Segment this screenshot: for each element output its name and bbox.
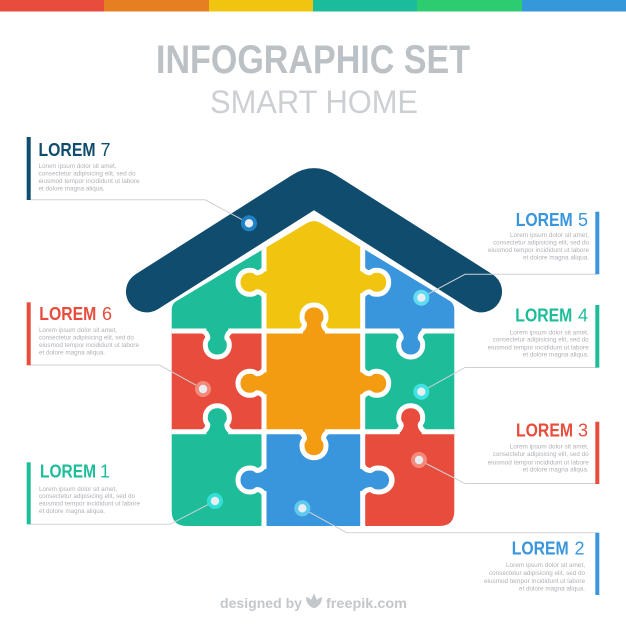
- tab: yellow into green: [238, 267, 267, 297]
- text block: lorem 1: eiusmod tempor incididunt ut labore: [39, 501, 141, 508]
- heading: lorem 6: LOREM: [39, 304, 96, 324]
- text block: lorem 6: Lorem ipsum dolor sit amet,: [39, 327, 117, 334]
- heading: lorem 1: LOREM: [40, 462, 96, 482]
- leader line 6: [30, 365, 203, 389]
- heading: lorem 2: LOREM: [512, 538, 569, 558]
- text block: lorem 5: [488, 232, 590, 262]
- text block: lorem 5: et dolore magna aliqua.: [523, 254, 589, 262]
- title: INFOGRAPHIC SET: [156, 38, 470, 82]
- leader line 3: [419, 460, 596, 484]
- heading: lorem 4: 4: [578, 306, 588, 326]
- text block: lorem 5: eiusmod tempor incididunt ut labore: [488, 247, 590, 254]
- marker 7: [241, 215, 257, 231]
- text block: lorem 4: eiusmod tempor incididunt ut labore: [488, 344, 589, 351]
- tab: orange into green: [360, 368, 389, 398]
- leader line 5: [421, 274, 596, 298]
- text block: lorem 3: consectetur adipisicing elit, sed do: [493, 451, 589, 458]
- leader line 7: [30, 200, 249, 223]
- text block: lorem 7: consectetur adipisicing elit, sed do: [38, 170, 136, 178]
- text block: lorem 3: et dolore magna aliqua.: [523, 466, 589, 473]
- tab: orange into blue: [299, 429, 329, 458]
- piece: bottom right red: [363, 432, 455, 527]
- heading: lorem 2: 2: [574, 538, 585, 558]
- text block: lorem 4: consectetur adipisicing elit, sed do: [493, 336, 589, 343]
- footer credit: freepik.com: [326, 595, 407, 611]
- text block: lorem 6: et dolore magna aliqua.: [39, 350, 105, 356]
- text block: lorem 6: [39, 327, 140, 356]
- piece: top left green: [172, 248, 264, 331]
- tab: red into green: [396, 406, 426, 435]
- piece: middle right green: [363, 331, 455, 432]
- piece: middle left red: [171, 331, 264, 432]
- tab: green into red: [202, 328, 232, 357]
- text block: lorem 3: eiusmod tempor incididunt ut labore: [488, 459, 589, 466]
- marker 6: [195, 381, 211, 397]
- marker 1: [207, 493, 223, 509]
- heading: lorem 6: 6: [102, 304, 112, 324]
- heading: lorem 7: 7: [100, 140, 111, 160]
- marker 2: [294, 500, 310, 516]
- text block: lorem 4: et dolore magna aliqua.: [523, 351, 589, 358]
- text block: lorem 6: consectetur adipisicing elit, sed do: [39, 334, 135, 342]
- text block: lorem 2: Lorem ipsum dolor sit amet,: [506, 562, 585, 569]
- tab: orange into red: [238, 368, 267, 398]
- heading: lorem 4: LOREM: [515, 306, 572, 326]
- piece: middle centre orange: [264, 331, 363, 432]
- panel: lorem 6: [27, 302, 140, 365]
- text block: lorem 5: consectetur adipisicing elit, sed do: [493, 240, 590, 246]
- text block: lorem 2: et dolore magna aliqua.: [519, 585, 585, 592]
- leader line 1: [30, 501, 215, 524]
- text block: lorem 2: consectetur adipisicing elit, sed do: [489, 570, 586, 577]
- text block: lorem 2: eiusmod tempor incididunt ut labore: [484, 578, 586, 585]
- text block: lorem 7: et dolore magna aliqua.: [38, 186, 105, 192]
- tab: orange into yellow: [299, 305, 329, 334]
- text block: lorem 7: eiusmod tempor incididunt ut labore: [38, 178, 140, 185]
- piece: bottom left green: [171, 432, 264, 527]
- marker 5: [413, 290, 429, 306]
- text block: lorem 1: Lorem ipsum dolor sit amet,: [39, 486, 117, 493]
- marker 4: [413, 384, 429, 400]
- heading: lorem 5: 5: [578, 210, 588, 230]
- text block: lorem 1: consectetur adipisicing elit, sed do: [39, 493, 136, 500]
- panel: lorem 2: [484, 533, 599, 595]
- tab: blue into red: [359, 465, 392, 495]
- heading: lorem 5: LOREM: [516, 210, 573, 230]
- tab: blue into green lower: [238, 465, 267, 495]
- panel: lorem 7: [27, 137, 140, 200]
- marker 3: [411, 452, 427, 468]
- puzzle house: [168, 215, 458, 530]
- icon: freepik logo: [306, 593, 322, 608]
- text block: lorem 3: Lorem ipsum dolor sit amet,: [510, 443, 589, 450]
- footer credit: designed by: [220, 595, 302, 611]
- roof: [126, 168, 502, 312]
- text block: lorem 4: Lorem ipsum dolor sit amet,: [510, 329, 589, 336]
- piece: bottom centre blue: [264, 432, 363, 527]
- tab: blue into green: [396, 328, 426, 357]
- heading: lorem 7: LOREM: [38, 140, 96, 160]
- text block: lorem 1: et dolore magna aliqua.: [39, 508, 105, 515]
- heading: lorem 3: 3: [578, 421, 588, 441]
- text block: lorem 2: [484, 562, 586, 592]
- leader line 4: [421, 368, 596, 392]
- tab: yellow into blue: [360, 267, 389, 297]
- top colour bar: [0, 0, 626, 12]
- text block: lorem 5: Lorem ipsum dolor sit amet,: [510, 232, 589, 239]
- heading: lorem 3: LOREM: [516, 421, 573, 441]
- piece: top right blue: [362, 248, 454, 331]
- text block: lorem 4: [488, 329, 589, 358]
- footer credit: [220, 593, 407, 611]
- text block: lorem 7: Lorem ipsum dolor sit amet,: [38, 163, 117, 170]
- piece: top centre yellow: [264, 218, 363, 331]
- text block: lorem 1: [39, 486, 141, 515]
- text block: lorem 6: eiusmod tempor incididunt ut labore: [39, 342, 140, 349]
- subtitle: SMART HOME: [210, 84, 418, 120]
- text block: lorem 3: [488, 443, 589, 473]
- panel: lorem 3: [488, 421, 599, 484]
- panel: lorem 4: [488, 305, 599, 368]
- leader line 2: [302, 508, 596, 533]
- panel: lorem 5: [488, 210, 599, 274]
- panel: lorem 1: [27, 462, 141, 524]
- tab: green into red lower: [202, 406, 232, 435]
- text block: lorem 7: [38, 163, 140, 192]
- heading: lorem 1: 1: [100, 462, 110, 482]
